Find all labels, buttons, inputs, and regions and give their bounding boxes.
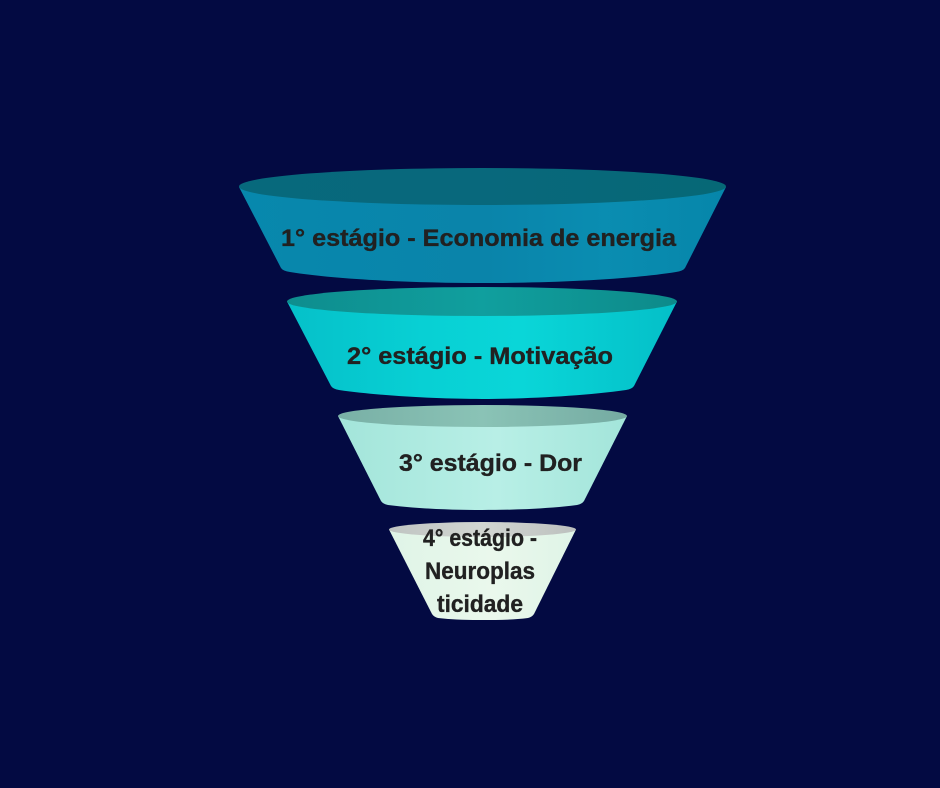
stage 4 label: Neuroplas (425, 558, 535, 585)
stage 1 body (239, 187, 726, 283)
stage 2 body (287, 302, 677, 399)
stage 4 label (423, 525, 537, 618)
stage 2 top ellipse (287, 287, 677, 316)
stage 3 segment (338, 405, 627, 510)
stage 1 label: 1° estágio - Economia de energia (281, 225, 677, 252)
stage 3 body (338, 416, 627, 510)
stage 2 label: 2° estágio - Motivação (347, 343, 613, 370)
stage 3 label: 3° estágio - Dor (399, 450, 582, 477)
stage 4 top ellipse (389, 522, 576, 537)
stage 4 segment (389, 522, 576, 620)
stage 4 label: ticidade (437, 591, 523, 618)
stage 4 body (389, 530, 576, 620)
stage 4 label: 4° estágio - (423, 525, 537, 552)
stage 2 segment (287, 287, 677, 399)
stage 3 top ellipse (338, 405, 627, 427)
stage 1 top ellipse (239, 168, 726, 205)
stage 1 segment (239, 168, 726, 283)
